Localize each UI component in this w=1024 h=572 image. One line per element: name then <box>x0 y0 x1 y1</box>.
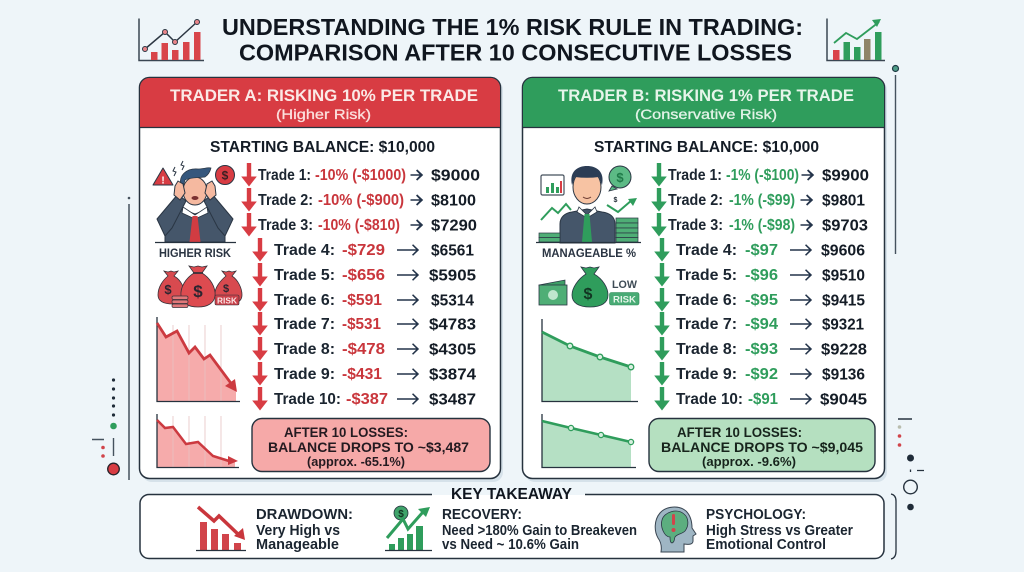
trade 3 B: $9703 <box>822 218 868 234</box>
trade 10 B: -$91 <box>748 391 778 408</box>
icon: money bags: $ <box>223 283 229 295</box>
label: manageable: MANAGEABLE % <box>542 248 636 260</box>
title: UNDERSTANDING THE 1% RISK RULE IN TRADING: <box>222 14 803 40</box>
trade 1 B: $9900 <box>822 168 869 184</box>
trade 3 A: -10% (-$810) <box>318 217 400 234</box>
trade 9 B <box>654 362 865 386</box>
trade 5 A <box>252 263 476 286</box>
trade 7 A: Trade 7: <box>274 316 335 333</box>
icon: cash and low risk <box>539 267 639 307</box>
trade 8 B: $9228 <box>821 342 867 358</box>
text: recovery <box>442 507 637 553</box>
icon: drawdown <box>196 507 246 550</box>
panel B header: (Conservative Risk) <box>635 106 777 122</box>
trade 5 B: -$96 <box>745 267 778 284</box>
icon: stressed trader: $ <box>222 168 229 182</box>
chart: small green line <box>542 414 636 468</box>
trade 4 B <box>654 238 865 262</box>
icon: cash and low risk: LOW <box>612 279 638 291</box>
trade 4 B: Trade 4: <box>676 242 737 259</box>
callout: trader B result: (approx. -9.6%) <box>702 455 796 469</box>
trade 7 B: $9321 <box>822 316 864 334</box>
trade 7 A <box>252 312 476 336</box>
trade 8 B <box>654 337 867 360</box>
icon: money bags: RISK <box>217 296 238 306</box>
trade 9 A: $3874 <box>429 366 476 384</box>
trade 5 A: -$656 <box>342 267 385 284</box>
trade 2 A: $8100 <box>431 192 476 210</box>
trade 9 A <box>252 362 476 386</box>
panel A header: (Higher Risk) <box>276 106 371 122</box>
text: recovery: Need >180% Gain to Breakeven <box>442 523 637 539</box>
callout: trader A result: BALANCE DROPS TO ~$3,487 <box>268 439 469 455</box>
chart: large red drawdown <box>157 317 240 402</box>
trade 2 A: Trade 2: <box>258 192 313 209</box>
trade 8 B: Trade 8: <box>676 341 737 358</box>
trade 7 A: -$531 <box>342 316 381 333</box>
callout: trader A result <box>252 418 490 472</box>
text: psychology: PSYCHOLOGY: <box>706 507 806 523</box>
trade 3 B: Trade 3: <box>668 217 723 234</box>
trade 4 A <box>252 238 474 262</box>
callout: trader A result: (approx. -65.1%) <box>307 455 405 469</box>
trade 7 B <box>654 312 864 336</box>
icon: money bags <box>158 266 242 308</box>
trade 8 A: -$478 <box>342 341 385 358</box>
trade 10 A: $3487 <box>429 392 476 408</box>
trade 1 B <box>651 163 869 186</box>
starting balance A: STARTING BALANCE: $10,000 <box>210 139 435 156</box>
trade 1 A: -10% (-$1000) <box>315 167 406 184</box>
text: psychology: High Stress vs Greater <box>706 523 853 539</box>
trade 2 A <box>241 188 476 212</box>
icon: stressed trader <box>153 161 236 242</box>
trade 9 B: $9136 <box>822 366 865 384</box>
trade 7 B: -$94 <box>745 316 778 333</box>
trade 9 A: -$431 <box>342 366 382 383</box>
trade 8 A: $4305 <box>429 342 476 358</box>
text: drawdown: Manageable <box>256 537 339 553</box>
icon: calm trader <box>536 166 641 243</box>
trade 2 B: $9801 <box>822 192 865 210</box>
text: drawdown: Very High vs <box>256 523 340 539</box>
trade 3 B: -1% (-$98) <box>729 217 795 234</box>
icon: calm trader: $ <box>616 170 624 185</box>
trade 6 B: Trade 6: <box>676 292 737 309</box>
chart: large green line <box>542 319 638 402</box>
trade 10 A: -$387 <box>346 391 388 408</box>
text: recovery: vs Need ~ 10.6% Gain <box>442 537 579 553</box>
trade 3 A: $7290 <box>431 218 477 234</box>
text: recovery: RECOVERY: <box>442 507 522 523</box>
text: drawdown: DRAWDOWN: <box>256 507 353 523</box>
icon: calm trader: $ <box>614 197 618 204</box>
trade rows A <box>241 163 480 410</box>
trade 4 B: -$97 <box>745 242 778 259</box>
trade 6 A: $5314 <box>431 292 474 310</box>
title <box>222 14 803 66</box>
icon: stressed trader: ! <box>161 176 165 186</box>
trade 3 B <box>651 213 868 236</box>
trade 6 B: -$95 <box>745 292 778 309</box>
trade 5 B: Trade 5: <box>676 267 737 284</box>
trade 8 B: -$93 <box>745 341 778 358</box>
trade 10 A: Trade 10: <box>274 391 341 408</box>
label: higher risk: HIGHER RISK <box>159 248 232 260</box>
trade 7 A: $4783 <box>429 316 476 334</box>
title: COMPARISON AFTER 10 CONSECUTIVE LOSSES <box>239 40 792 66</box>
trade 9 B: -$92 <box>745 366 778 383</box>
callout: trader B result: BALANCE DROPS TO ~$9,045 <box>661 439 863 455</box>
panel A header <box>140 78 500 128</box>
callout: trader B result <box>649 418 875 472</box>
decoration: left side line and dots <box>92 197 130 480</box>
trade 4 B: $9606 <box>821 242 865 260</box>
decoration: right side line and dots <box>891 66 924 559</box>
starting balance B: STARTING BALANCE: $10,000 <box>594 139 819 156</box>
trade 2 B <box>651 188 865 212</box>
panel B header: TRADER B: RISKING 1% PER TRADE <box>558 87 854 105</box>
trade 10 B: $9045 <box>820 392 867 408</box>
trade 8 A: Trade 8: <box>274 341 335 358</box>
trade 6 B <box>654 288 865 312</box>
icon: money bags: $ <box>164 282 172 297</box>
icon: head <box>655 507 696 552</box>
panel A header: TRADER A: RISKING 10% PER TRADE <box>170 87 478 105</box>
text: drawdown <box>256 507 353 553</box>
trade 3 A: Trade 3: <box>258 217 313 234</box>
panel: key takeaway <box>140 486 884 558</box>
trade 4 A: -$729 <box>342 242 385 259</box>
panel: trader B <box>522 78 887 482</box>
trade 6 A: Trade 6: <box>274 292 335 309</box>
panel: trader A <box>140 78 503 482</box>
trade 5 A: $5905 <box>429 268 476 284</box>
trade 8 A <box>252 337 476 360</box>
trade 1 A: $9000 <box>431 168 480 184</box>
trade 6 A <box>252 288 474 312</box>
callout: trader A result: AFTER 10 LOSSES: <box>284 424 408 440</box>
trade 1 B: -1% (-$100) <box>726 167 799 184</box>
trade 1 A: Trade 1: <box>258 167 311 184</box>
callout: trader B result: AFTER 10 LOSSES: <box>677 424 802 440</box>
trade 9 B: Trade 9: <box>676 366 737 383</box>
trade 10 A <box>252 387 476 410</box>
key takeaway heading: KEY TAKEAWAY <box>451 486 573 503</box>
icon: red bar chart with line <box>139 18 204 60</box>
icon: recovery <box>385 506 432 550</box>
trade 4 A: Trade 4: <box>274 242 335 259</box>
trade rows B <box>651 163 869 410</box>
chart: small red drawdown <box>157 414 239 468</box>
trade 7 B: Trade 7: <box>676 316 737 333</box>
text: psychology <box>706 507 853 553</box>
trade 9 A: Trade 9: <box>274 366 335 383</box>
icon: recovery: $ <box>398 509 404 520</box>
trade 2 A: -10% (-$900) <box>318 192 404 209</box>
trade 6 A: -$591 <box>342 292 382 309</box>
trade 1 B: Trade 1: <box>668 167 722 184</box>
trade 2 B: Trade 2: <box>668 192 723 209</box>
panel B header <box>523 78 884 128</box>
trade 5 B <box>654 263 865 286</box>
trade 5 B: $9510 <box>822 268 865 284</box>
text: psychology: Emotional Control <box>706 537 826 553</box>
icon: green bar chart with arrow <box>827 18 885 60</box>
icon: cash and low risk: $ <box>584 286 593 303</box>
trade 4 A: $6561 <box>431 242 474 260</box>
trade 2 B: -1% (-$99) <box>729 192 795 209</box>
trade 6 B: $9415 <box>822 292 865 310</box>
trade 3 A <box>241 213 477 236</box>
trade 5 A: Trade 5: <box>274 267 335 284</box>
icon: cash and low risk: RISK <box>613 294 636 306</box>
trade 10 B: Trade 10: <box>676 391 743 408</box>
trade 1 A <box>241 163 480 186</box>
icon: money bags: $ <box>193 282 203 301</box>
trade 10 B <box>654 387 867 410</box>
